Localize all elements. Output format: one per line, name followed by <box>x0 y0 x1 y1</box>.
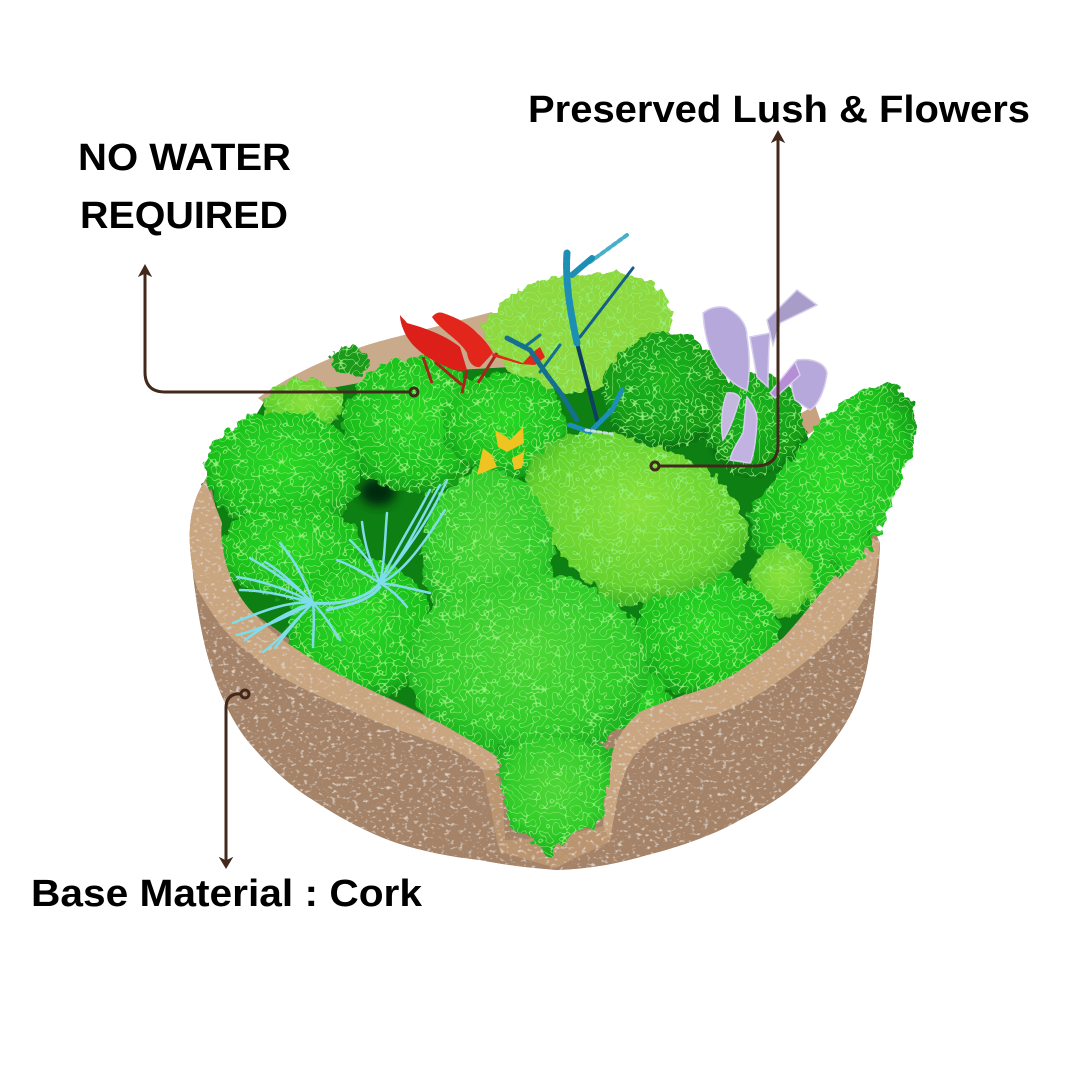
heading: no water required: REQUIRED <box>80 195 288 237</box>
deep shadow left centre <box>360 478 396 506</box>
lower left moss behind feather <box>288 558 432 702</box>
left upper moss clump <box>205 412 361 532</box>
heading: no water required: NO WATER <box>78 137 291 179</box>
cork rim top faces <box>190 480 880 868</box>
arrow: base material cork <box>220 690 249 868</box>
front large moss clump <box>408 573 648 763</box>
icon: yellow flowers <box>477 427 525 475</box>
deep shadow upper right <box>716 431 764 459</box>
lower right moss clump <box>635 571 779 699</box>
right rim band <box>603 538 880 840</box>
callout: preserved lush and flowers <box>528 89 1030 470</box>
arrow: preserved lush and flowers <box>651 131 784 470</box>
heading: base material cork: Base Material : Cork <box>31 873 423 915</box>
moss overflow through notch <box>498 738 612 856</box>
icon: red dried flower <box>400 312 545 393</box>
small right lime moss <box>750 546 814 618</box>
icon: blue dried sprig <box>507 235 633 434</box>
heading: preserved lush and flowers: Preserved Lush & Flowers <box>528 89 1030 131</box>
moss under purple flower <box>705 373 805 477</box>
callout: base material <box>31 690 423 915</box>
lower right fill moss <box>610 670 670 730</box>
icon: purple flower <box>703 290 827 463</box>
callout: no water required <box>78 137 418 396</box>
far left lime moss <box>265 379 345 431</box>
centre lime moss clump <box>525 433 748 605</box>
back pale moss mound <box>482 273 672 392</box>
left lower moss clump <box>220 504 364 600</box>
moss arrangement <box>205 273 916 763</box>
central moss clump <box>422 470 554 640</box>
right tall moss clump <box>750 385 916 615</box>
moss bed <box>212 360 855 750</box>
rear middle moss clump <box>443 373 567 477</box>
cork base: back rim and outer wall <box>190 312 880 870</box>
small dark moss at rear <box>330 348 370 376</box>
moss tip over right rim <box>830 530 872 578</box>
arrow: no water required <box>139 265 418 396</box>
rear right dark moss clump <box>603 334 727 450</box>
rear centre moss clump <box>343 357 487 493</box>
left rim band <box>190 480 502 770</box>
notch ledge <box>483 770 610 868</box>
icon: turquoise feather plant <box>233 480 447 652</box>
